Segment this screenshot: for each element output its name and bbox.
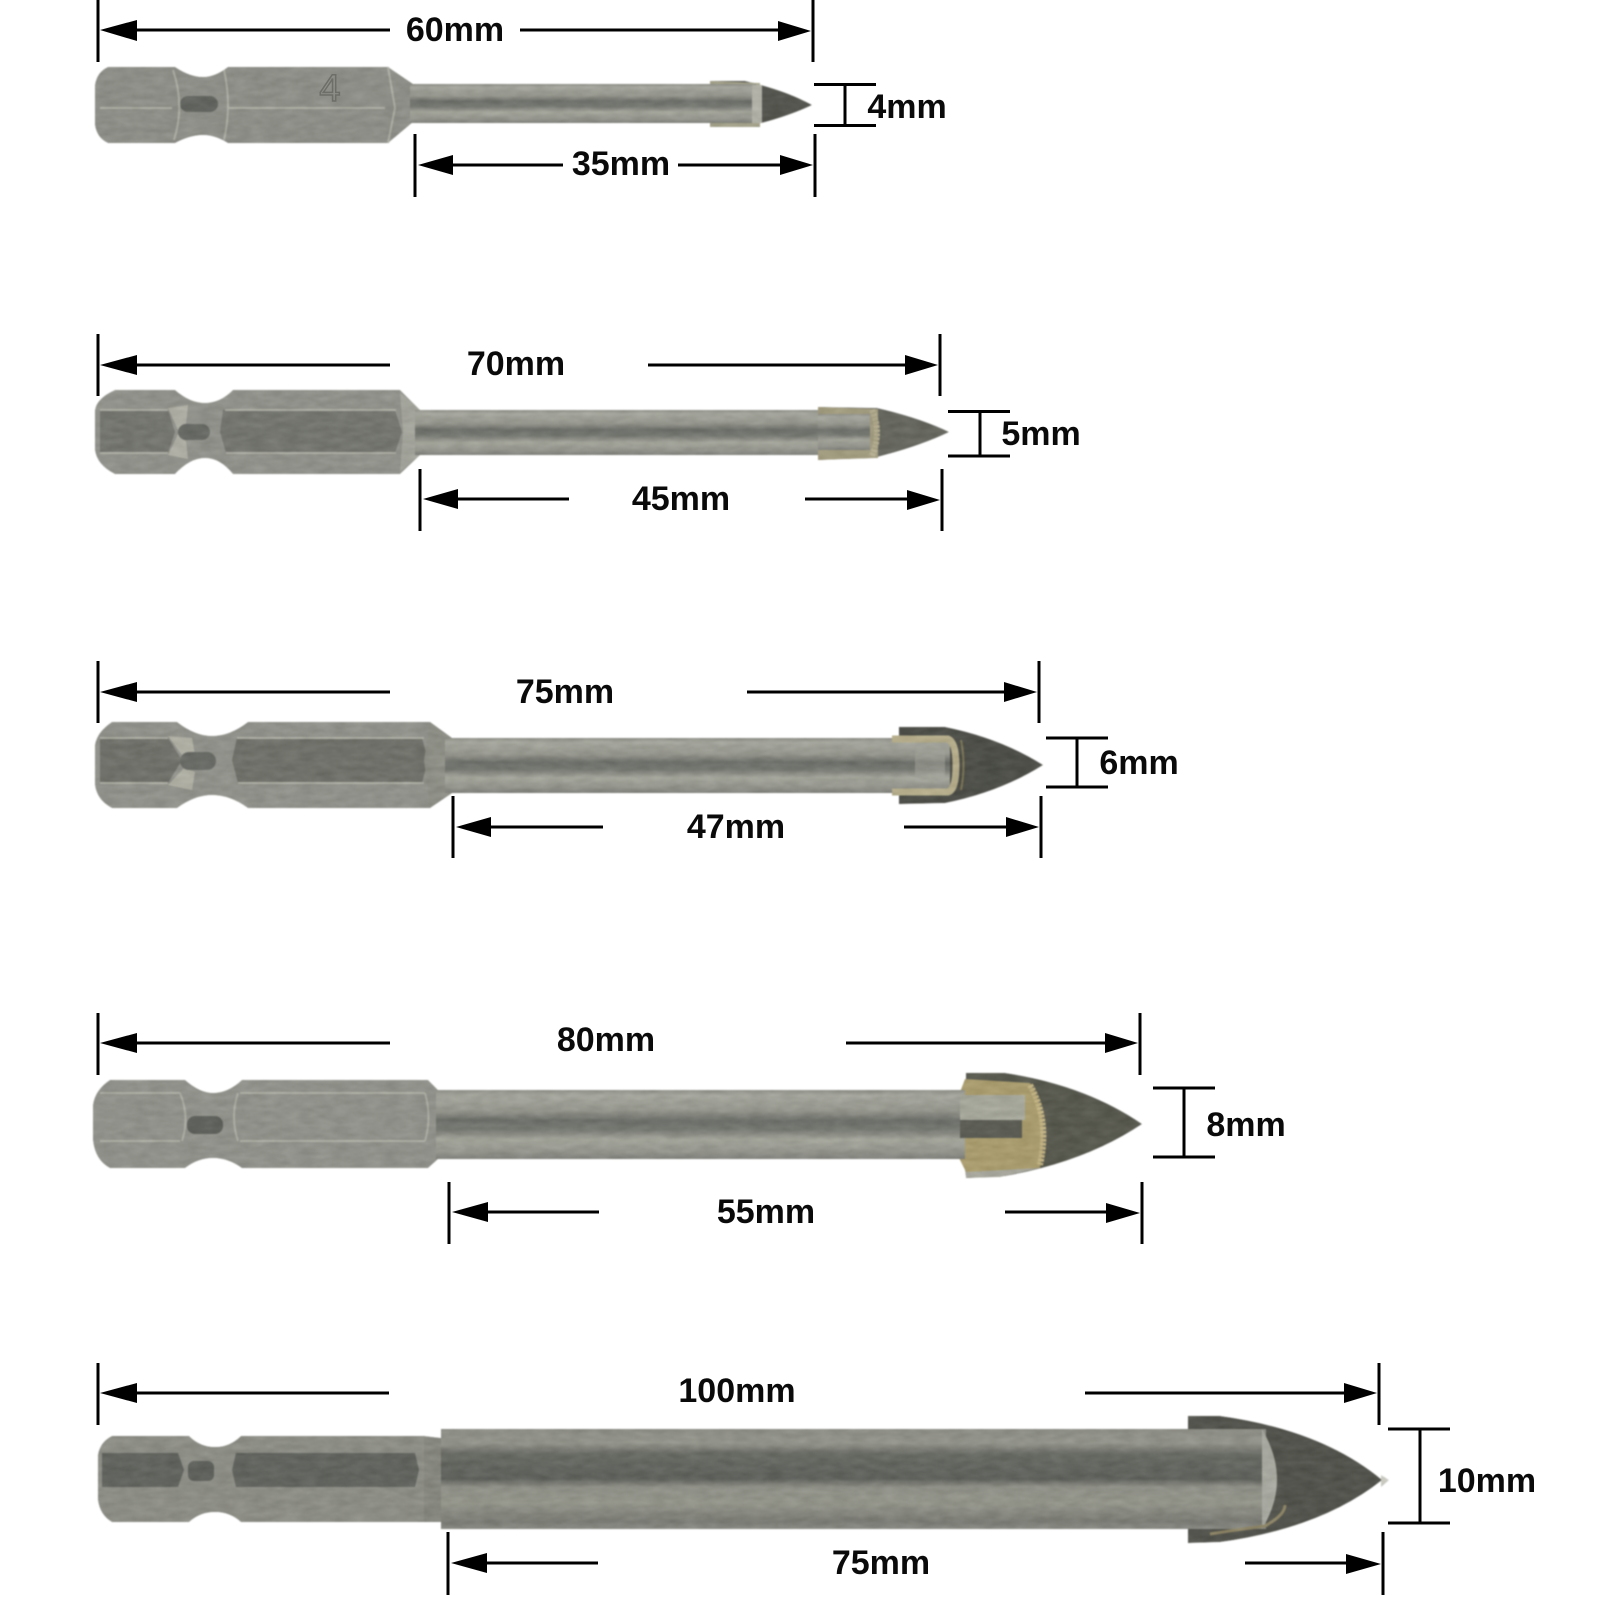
dimension: total length 60mm: 60mm (406, 11, 504, 49)
dimension: total length 75mm (98, 661, 1039, 723)
dimension: total length 80mm: 80mm (557, 1021, 655, 1059)
dimension: working length 75mm: 75mm (832, 1544, 930, 1582)
dimension: working length 45mm: 45mm (632, 480, 730, 518)
dimension: total length 100mm: 100mm (678, 1372, 796, 1410)
dimension: working length 55mm (449, 1182, 1142, 1244)
panel: 10mm drill bit with dimensions (98, 1363, 1536, 1595)
dimension: diameter 4mm (814, 84, 947, 126)
dimension: diameter 4mm: 4mm (867, 88, 947, 126)
dimension: total length 100mm (98, 1363, 1379, 1425)
dimension: working length 55mm: 55mm (717, 1193, 815, 1231)
panel: 4mm drill bit with dimensions (95, 0, 947, 197)
panel: 5mm drill bit with dimensions (95, 334, 1081, 531)
dimension: working length 35mm (415, 134, 815, 197)
dimension: diameter 6mm (1046, 738, 1179, 787)
dimension: working length 35mm: 35mm (572, 145, 670, 183)
dimension: total length 70mm: 70mm (467, 345, 565, 383)
drill bit: 4mm (95, 67, 812, 143)
drill bit: 6mm (95, 722, 1043, 808)
dimension: diameter 10mm: 10mm (1438, 1462, 1536, 1500)
panel: 8mm drill bit with dimensions (93, 1013, 1286, 1244)
dimension: diameter 8mm (1153, 1088, 1286, 1157)
dimension: working length 45mm (420, 469, 942, 531)
dimension: working length 47mm: 47mm (687, 808, 785, 846)
dimension: working length 47mm (453, 796, 1041, 858)
drill bit: 5mm (95, 390, 949, 474)
dimension: diameter 8mm: 8mm (1206, 1106, 1286, 1144)
dimension: diameter 5mm (948, 411, 1081, 456)
dimension: total length 70mm (98, 334, 940, 396)
dimension: diameter 10mm (1388, 1429, 1536, 1523)
dimension: total length 60mm (98, 0, 813, 62)
drill bit: 8mm (93, 1073, 1142, 1178)
engraved size mark: 4 (319, 68, 341, 110)
dimension: diameter 5mm: 5mm (1001, 415, 1081, 453)
dimension: diameter 6mm: 6mm (1099, 744, 1179, 782)
dimension: total length 80mm (98, 1013, 1140, 1075)
dimension: working length 75mm (448, 1532, 1383, 1595)
panel: 6mm drill bit with dimensions (95, 661, 1179, 858)
drill bit: 10mm (98, 1416, 1389, 1543)
dimension: total length 75mm: 75mm (516, 673, 614, 711)
